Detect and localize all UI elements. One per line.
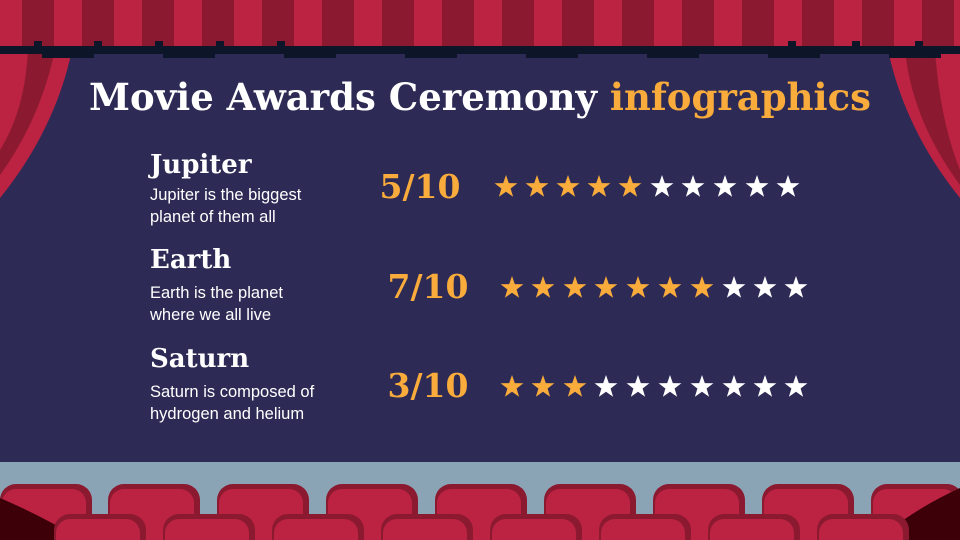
curtain: right side	[888, 50, 960, 198]
seat shadows	[0, 498, 82, 540]
item: Jupiter: planet of them all	[150, 208, 276, 226]
item: Jupiter	[148, 150, 799, 226]
item: Saturn	[150, 344, 807, 423]
item: Jupiter: Jupiter	[148, 150, 252, 180]
item: Saturn: 3/10	[388, 366, 468, 405]
seats: back row	[0, 484, 960, 540]
item: Saturn: Saturn	[150, 344, 249, 374]
item: Jupiter: Jupiter is the biggest	[150, 186, 302, 204]
item: Earth	[149, 245, 807, 324]
floor	[0, 462, 960, 540]
item: Saturn: Saturn is composed of	[150, 383, 315, 401]
seats: front row	[54, 514, 909, 540]
item: Earth: Earth is the planet	[150, 284, 283, 302]
title: Movie Awards Ceremony infographics	[89, 75, 871, 119]
item: Earth: Earth	[150, 245, 231, 275]
curtain: left side	[0, 50, 72, 198]
item: Saturn: hydrogen and helium	[150, 405, 304, 423]
item: Earth: where we all live	[149, 306, 271, 324]
item: Earth: 7/10	[388, 267, 468, 306]
curtain: top valance	[0, 0, 960, 58]
item: Jupiter: 5/10	[380, 167, 460, 206]
